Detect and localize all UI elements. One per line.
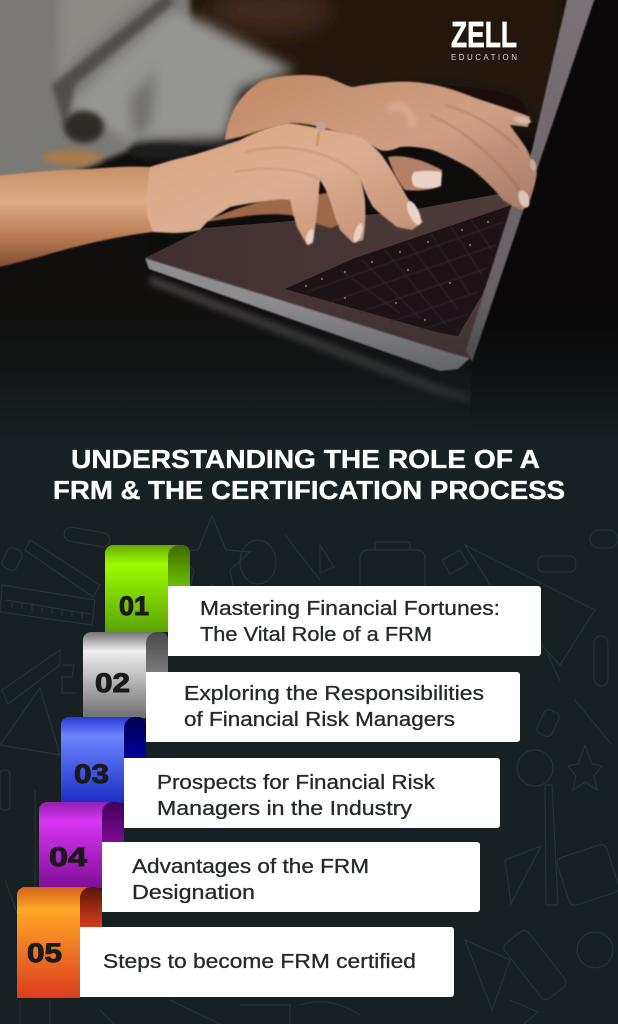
number 03: 03 <box>74 759 109 789</box>
ribbon fold 03 <box>124 717 146 758</box>
ribbon fold 02 <box>146 632 168 673</box>
logo: Zell Education: EDUCATION <box>451 53 517 62</box>
ribbon 05 <box>17 887 102 998</box>
background doodle pattern <box>0 516 618 1024</box>
laptop base and front edge <box>145 190 520 403</box>
hero photo: hands typing on a laptop <box>0 0 618 441</box>
title <box>53 444 565 505</box>
front hand and forearm <box>0 121 424 268</box>
blurred brown background <box>160 0 570 135</box>
table top <box>0 225 618 440</box>
card 03 <box>124 758 500 828</box>
title: UNDERSTANDING THE ROLE OF A <box>71 444 540 474</box>
number 04: 04 <box>49 842 87 872</box>
ribbon 02 <box>83 632 168 718</box>
card 03: Managers in the Industry <box>157 798 412 820</box>
card 04: Advantages of the FRM <box>132 856 369 878</box>
grey sweater <box>0 0 295 182</box>
logo: Zell Education: ZELL <box>451 14 517 55</box>
rear hand <box>225 75 537 210</box>
ribbon 03 <box>61 717 146 803</box>
card 01: Mastering Financial Fortunes: <box>200 598 500 620</box>
card 03: Prospects for Financial Risk <box>157 772 436 794</box>
number 05: 05 <box>27 938 62 968</box>
card 05: Steps to become FRM certified <box>103 951 416 973</box>
logo: Zell Education <box>451 14 517 62</box>
step 04 <box>39 802 480 912</box>
fade of photo into the dark background <box>0 300 618 441</box>
number 01: 01 <box>119 591 149 621</box>
card 05 <box>80 927 454 997</box>
card 04 <box>102 842 480 912</box>
ribbon fold 04 <box>102 802 124 842</box>
step 01 <box>105 545 541 656</box>
ribbon 04 <box>39 802 124 888</box>
step 05 <box>17 887 454 998</box>
card 02 <box>146 672 520 742</box>
ribbon fold 01 <box>168 545 190 586</box>
title: FRM & THE CERTIFICATION PROCESS <box>53 475 565 505</box>
laptop screen edge and back <box>466 0 618 440</box>
card 04: Designation <box>132 882 255 904</box>
card 02: Exploring the Responsibilities <box>184 683 484 705</box>
step 03 <box>61 717 500 828</box>
card 02: of Financial Risk Managers <box>184 709 455 731</box>
card 01: The Vital Role of a FRM <box>200 624 432 646</box>
ribbon fold 05 <box>80 887 102 927</box>
step 02 <box>83 632 520 742</box>
ribbon 01 <box>105 545 190 632</box>
card 01 <box>168 586 541 656</box>
number 02: 02 <box>95 668 130 698</box>
